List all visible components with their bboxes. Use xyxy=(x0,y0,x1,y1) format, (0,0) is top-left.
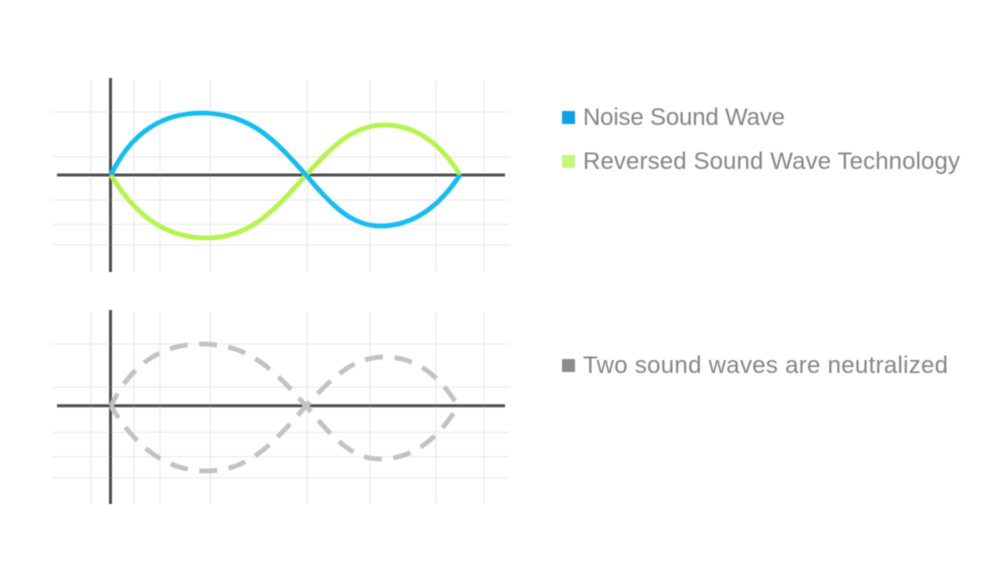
chart: neutralized sound waves xyxy=(53,310,509,504)
dashed wave curves xyxy=(111,344,458,471)
chart: noise and reversed sound waves xyxy=(53,78,509,272)
neutralized axes xyxy=(57,310,505,504)
legend: reversed sound wave technology: Reversed Sound Wave Technology xyxy=(583,148,960,175)
axes xyxy=(57,78,505,272)
legend: neutralized: Two sound waves are neutralized xyxy=(583,352,948,379)
legend: noise sound wave: Noise Sound Wave xyxy=(583,104,785,131)
reversed sound wave curve xyxy=(111,125,460,238)
noise sound wave curve xyxy=(111,113,460,226)
